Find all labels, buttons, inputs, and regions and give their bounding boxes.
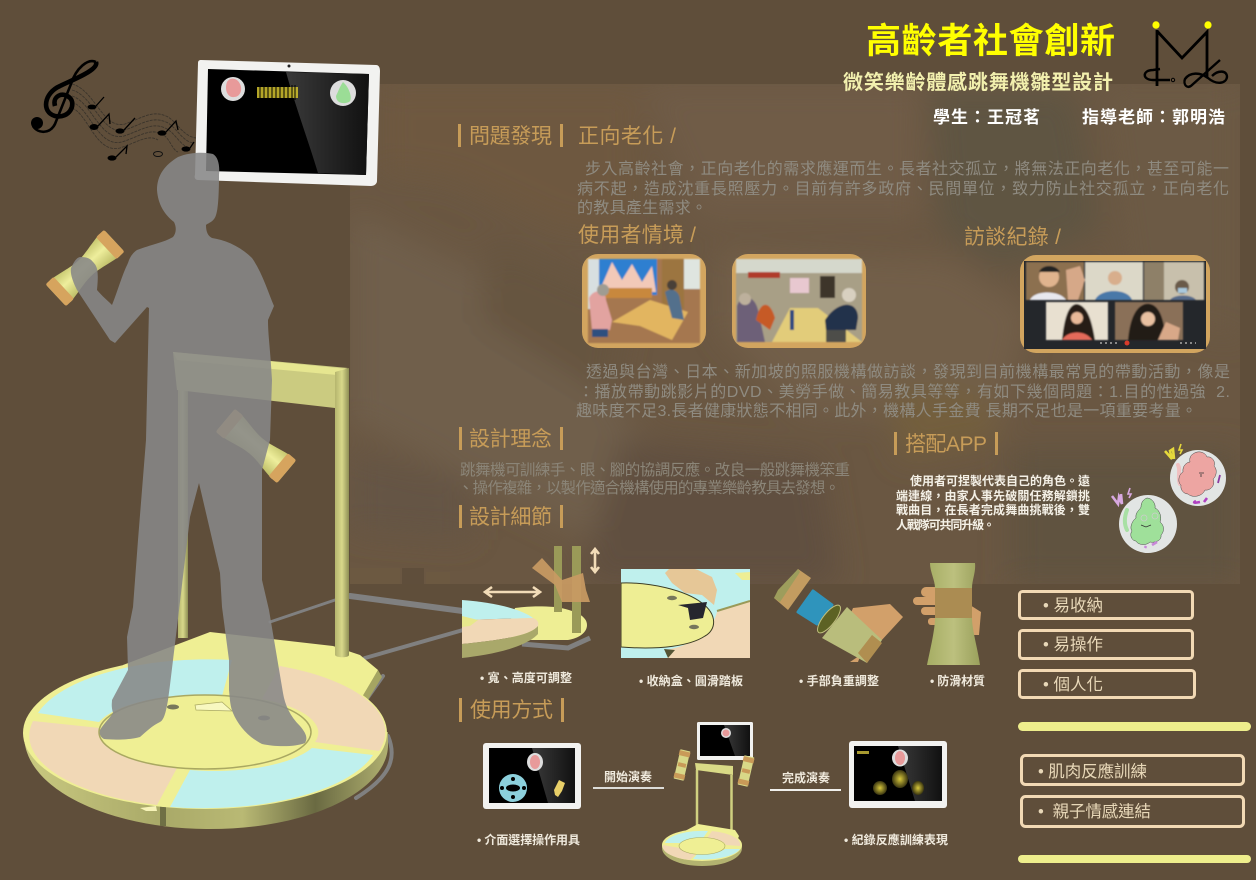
heading: 訪談紀錄: 訪談紀錄 / — [964, 226, 1061, 249]
feature box: 易操作 — [1020, 630, 1192, 658]
student and advisor — [933, 107, 1225, 127]
heading: 正向老化: 正向老化 / — [578, 125, 676, 148]
rim — [24, 732, 388, 829]
text block: 正向老化 body: 病不起，造成沈重長照壓力。目前有許多政府、民間單位，致力防止社交孤立，正向老化 — [577, 180, 1229, 198]
pad: peach left — [29, 721, 177, 805]
right post — [335, 368, 349, 657]
label: start play with arrow line: 開始演奏 — [604, 769, 652, 784]
top disc — [23, 657, 387, 809]
icon: green character — [1112, 488, 1177, 553]
caption: tool selection: • 介面選擇操作用具 — [477, 832, 580, 847]
text block: interview findings: 透過與台灣、日本、新加坡的照服機構做訪談，發現到目前機構最常見的帶動活動，像是 — [586, 363, 1230, 381]
text block: 設計理念 body — [458, 460, 850, 497]
illustration: small machine with tablet — [662, 722, 755, 866]
panel: blurred background photo of hands — [350, 84, 1240, 584]
illustration: hand weight adjustment — [774, 569, 903, 663]
feature box: 易收納 — [1020, 592, 1192, 618]
title: 高齡者社會創新 — [866, 22, 1115, 61]
icon: music staff with treble clef — [31, 61, 196, 161]
label: start play with arrow line — [593, 769, 664, 789]
text block: 正向老化 body: 步入高齡社會，正向老化的需求應運而生。長者社交孤立，將無法正向老化，甚至可能一 — [585, 159, 1229, 178]
illustration: adjustable width and height — [462, 546, 599, 658]
text block: interview findings — [576, 363, 1230, 420]
feature box: 個人化: • 個人化 — [1043, 675, 1103, 694]
back plate — [120, 632, 378, 720]
frame top bar — [173, 352, 348, 408]
photo: activity room — [732, 254, 866, 348]
feature box: 親子情感連結: • 親子情感連結 — [1038, 801, 1151, 821]
text block: APP description: 戰曲目，在長者完成舞曲挑戰後，雙 — [896, 502, 1090, 517]
heading: 使用者情境: 使用者情境 / — [578, 224, 696, 247]
center plate — [99, 695, 311, 769]
heading: 使用方式: 使用方式 — [470, 699, 553, 722]
yellow divider bar — [1018, 722, 1251, 731]
pad: blue bottom — [170, 748, 373, 808]
figure: grey human silhouette — [71, 153, 306, 746]
text block: APP description — [896, 473, 1090, 532]
label: finish play with arrow line — [770, 770, 841, 791]
text block: APP description: 端連線，由家人事先破關任務解鎖挑 — [896, 488, 1090, 503]
feature box: 肌肉反應訓練 — [1022, 756, 1244, 784]
heading: 設計理念: 設計理念 — [469, 428, 552, 451]
feature box: 易操作: • 易操作 — [1043, 635, 1103, 654]
feature box: 個人化 — [1020, 670, 1194, 698]
pad: peach right — [262, 666, 385, 751]
icon: ML logo — [1145, 21, 1227, 87]
pad: blue top-left — [38, 659, 232, 722]
text block: 設計理念 body: 、操作複雜，以製作適合機構使用的專業樂齡教具去發想。 — [458, 479, 840, 497]
subtitle: 微笑樂齡體感跳舞機雛型設計 — [843, 70, 1113, 94]
student and advisor: 指導老師：郭明浩 — [1082, 107, 1225, 127]
photo: online interview screenshot — [1020, 255, 1210, 353]
heading: 搭配APP: 搭配APP — [905, 433, 987, 456]
caption: hand weight: • 手部負重調整 — [799, 673, 879, 688]
caption: width and height: • 寬、高度可調整 — [480, 670, 572, 685]
caption: anti-slip: • 防滑材質 — [930, 673, 985, 688]
text block: APP description: 人戰隊可共同升級。 — [896, 517, 995, 532]
feature box: 肌肉反應訓練: • 肌肉反應訓練 — [1038, 761, 1147, 781]
tablet: main game screen — [195, 60, 380, 186]
illustration: storage box and pedal — [621, 563, 750, 658]
heading: 設計細節: 設計細節 — [469, 506, 552, 529]
dumbbell: right hand — [216, 409, 296, 483]
text block: 設計理念 body: 跳舞機可訓練手、眼、腳的協調反應。改良一般跳舞機笨重 — [460, 460, 850, 479]
caption: storage box: • 收納盒、圓滑踏板 — [639, 673, 743, 688]
tablet: training record screen — [849, 741, 947, 808]
icon: pink character — [1165, 444, 1226, 506]
photo: seniors at table — [582, 254, 706, 348]
text block: 正向老化 body: 的教具產生需求。 — [577, 199, 707, 217]
left post — [178, 388, 188, 638]
text block: 正向老化 body — [577, 159, 1229, 217]
yellow divider bar — [1018, 855, 1251, 863]
label: finish play with arrow line: 完成演奏 — [782, 770, 830, 785]
dumbbell: left hand — [46, 230, 124, 306]
illustration: dance machine platform and frame — [23, 352, 388, 829]
shadow lines of machine — [270, 596, 470, 798]
student and advisor: 學生：王冠茗 — [933, 108, 1040, 127]
caption: training record: • 紀錄反應訓練表現 — [844, 832, 948, 847]
tablet: tool selection screen — [483, 743, 581, 809]
text block: interview findings: 趣味度不足3.長者健康狀態不相同。此外，機構人手金費 長期不足也是一項重要考量。 — [576, 402, 1197, 420]
feature box: 親子情感連結 — [1022, 796, 1244, 826]
illustration: anti-slip grip — [913, 563, 981, 665]
heading: 問題發現: 問題發現 — [469, 125, 552, 148]
text block: interview findings: ：播放帶動跳影片的DVD、美勞手做、簡易教具等等，有如下幾個問題：1.目的性過強 2. — [578, 382, 1230, 401]
feature box: 易收納: • 易收納 — [1043, 596, 1103, 615]
text block: APP description: 使用者可捏製代表自己的角色。遠 — [910, 473, 1090, 488]
